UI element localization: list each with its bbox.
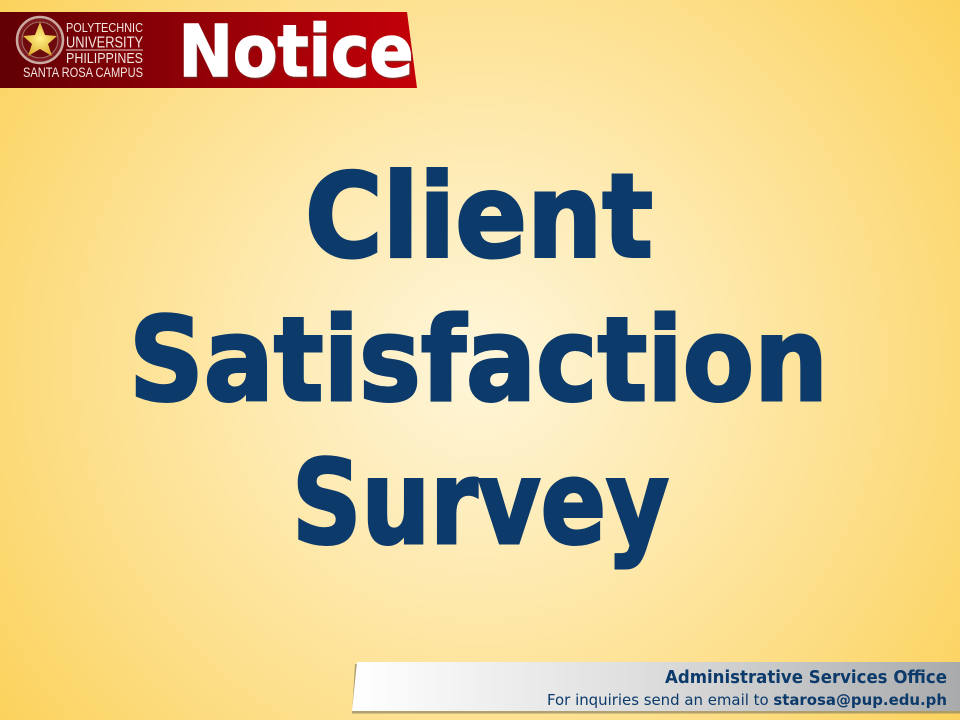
icon: university seal	[17, 17, 63, 63]
title line: Client: Client	[305, 150, 653, 284]
heading: Notice: Notice	[180, 12, 414, 94]
university name	[23, 21, 143, 80]
contact line: For inquiries send an email to starosa@pup.edu.ph	[547, 691, 947, 709]
title line: Survey: Survey	[292, 436, 669, 571]
heading: Notice: Notice	[178, 10, 414, 93]
footer shadow	[352, 664, 960, 714]
university name: POLYTECHNIC	[66, 21, 143, 35]
footer bar	[352, 662, 960, 714]
university name: PHILIPPINES	[66, 50, 143, 67]
university name: UNIVERSITY	[66, 34, 143, 52]
header banner	[0, 10, 417, 94]
banner shape	[0, 12, 417, 88]
footer panel	[352, 662, 960, 711]
university name: SANTA ROSA CAMPUS	[23, 65, 143, 80]
title line: Satisfaction: Satisfaction	[129, 293, 828, 428]
title	[129, 150, 828, 571]
